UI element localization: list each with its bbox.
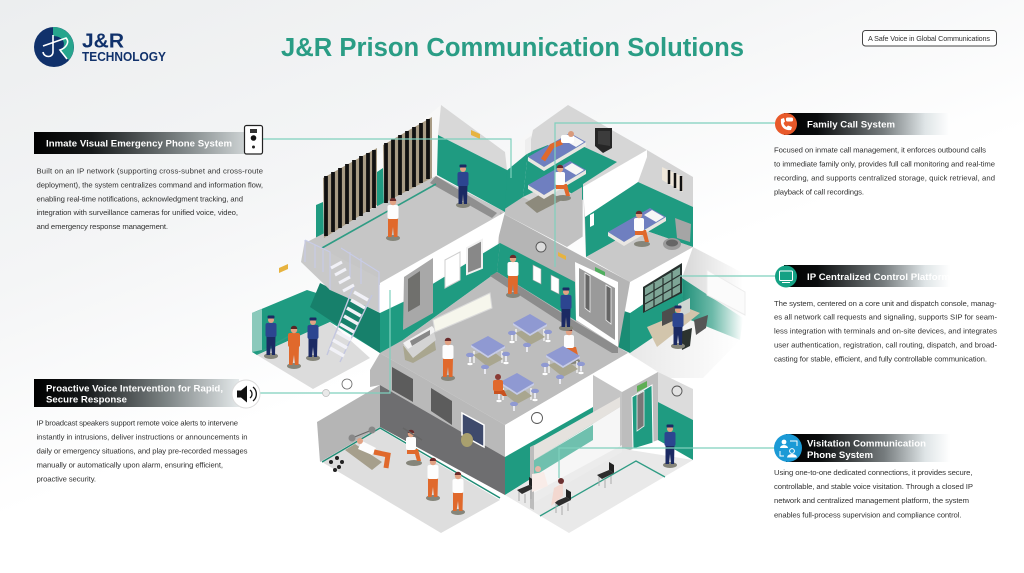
weight bench [345,426,388,470]
yellow alarm light [471,130,480,139]
wall posters [445,240,482,288]
lower stair room [252,240,380,389]
logo wordmark: TECHNOLOGY [82,50,167,64]
steel toilet and sink [663,218,691,250]
heading bar: Secure Response [46,394,127,406]
double doors with exit sign [575,262,618,347]
body text: enables full-process supervision and compliance control. [774,510,962,520]
wall clocks [342,379,682,424]
title: J&R Prison Communication Solutions [281,34,744,62]
ceiling speaker [322,390,330,396]
body text: controllable, and stable voice visitation. Through a closed IP [774,482,973,491]
squat barbell [403,428,422,440]
basketball hoop [461,413,484,447]
canteen tables [466,314,585,411]
heading bar: IP Centralized Control Platform [807,272,950,283]
body text [36,418,248,484]
heading bar [784,265,950,287]
body text: Focused on inmate call management, it enforces outbound calls [774,146,986,154]
yellow alarm light [558,252,566,260]
canteen floor and walls [380,212,630,425]
staircase [327,262,372,362]
body text: and emergency response management. [36,222,168,231]
body text: The system, centered on a core unit and dispatch console, manag- [774,299,997,308]
icon: visitation [774,434,802,462]
body text [774,468,973,520]
isometric prison building [252,105,745,533]
yellow alarm light [279,264,288,273]
body text: instantly in intrusions, deliver instructions or announcements in [36,432,248,442]
gym room [317,353,505,533]
tagline badge: A Safe Voice in Global Communications [868,34,990,43]
monitoring video wall [643,263,682,313]
visitation window [530,397,622,510]
inmates [287,198,520,515]
body text: casting for stable, efficient, and fully controllable communication. [774,354,987,364]
bunks with inmates [528,131,666,247]
body text: recording, and supports centralized storage, quick retrieval, and [774,174,995,182]
icon: phone [775,113,797,135]
visitor chairs [517,462,614,515]
logo wordmark [82,30,167,64]
canteen front wall and visitation [342,353,693,533]
logo wordmark: J&R [82,30,125,52]
visitor two [551,478,564,506]
body text: integration with surveillance cameras for unified voice, video, [36,208,238,217]
seated inmates behind tables [564,328,580,364]
wall vents [392,367,413,402]
body text: proactive security. [36,474,96,484]
body text: to immediate family only, provides full call monitoring and real-time [774,160,995,168]
body text: enabling real-time notifications, acknowledgment tracking, and [36,194,243,204]
heading bar: Family Call System [807,120,895,130]
yard upper level [305,105,507,285]
wall clock [536,242,546,252]
body text: network and centralized management platform, the system [774,496,969,505]
right single cell [583,150,693,282]
heading bar [786,434,950,462]
panel: inmate visual emergency phone system [34,126,263,231]
logo mark [34,27,74,67]
body text [774,299,997,364]
panel: proactive voice intervention [34,379,260,484]
body text: es all network call requests and signaling, supports SIP for seam- [774,312,997,322]
body text: Using one-to-one dedicated connections, it provides secure, [774,468,972,477]
heading bar [34,132,263,154]
panel: IP centralized control platform [774,265,997,364]
heading bar: Visitation Communication [807,438,926,450]
kitchen counter [403,293,492,363]
icon: emergency phone [244,126,262,154]
teal door [632,381,653,449]
wall TV [595,128,612,153]
body text: IP broadcast speakers support remote voice alerts to intervene [36,418,238,428]
barred windows [323,117,432,238]
body text: less integration with terminals and on-site devices, and integrates [774,326,997,336]
guards [264,164,677,468]
body text: playback of call recordings. [774,188,864,196]
panel: family call system [774,113,995,196]
body text [774,146,995,196]
body text: daily or emergency situations, and play pre-recorded messages [36,446,248,456]
heading bar [34,379,239,407]
railings [305,240,379,312]
heading bar: Inmate Visual Emergency Phone System [46,138,232,150]
body text [36,166,263,231]
heading bar [784,113,950,135]
panel: visitation communication phone system [774,434,973,520]
body text: deployment), the system centralizes command and information flow, [36,180,263,190]
control desk and operator [647,298,708,350]
body text: Built on an IP network (supporting cross-subnet and cross-route [36,166,263,176]
stair platform [301,240,379,312]
control room wing [618,247,745,378]
leader lines [260,123,775,478]
body text: user authentication, registration, call routing, dispatch, and broad- [774,340,997,350]
inner door [403,258,433,330]
visitor [532,466,548,492]
heading bar: Phone System [807,450,873,461]
icon: control monitor [775,266,797,288]
wall phones [533,265,559,294]
heading bar: Proactive Voice Intervention for Rapid, [46,384,223,394]
upper bunk cell [500,105,647,247]
dumbbells [329,456,344,472]
icon: speaker [232,380,260,408]
body text: manually or automatically upon alarm, ensuring efficient, [36,460,223,470]
logo [34,27,167,67]
tagline badge [862,30,996,46]
